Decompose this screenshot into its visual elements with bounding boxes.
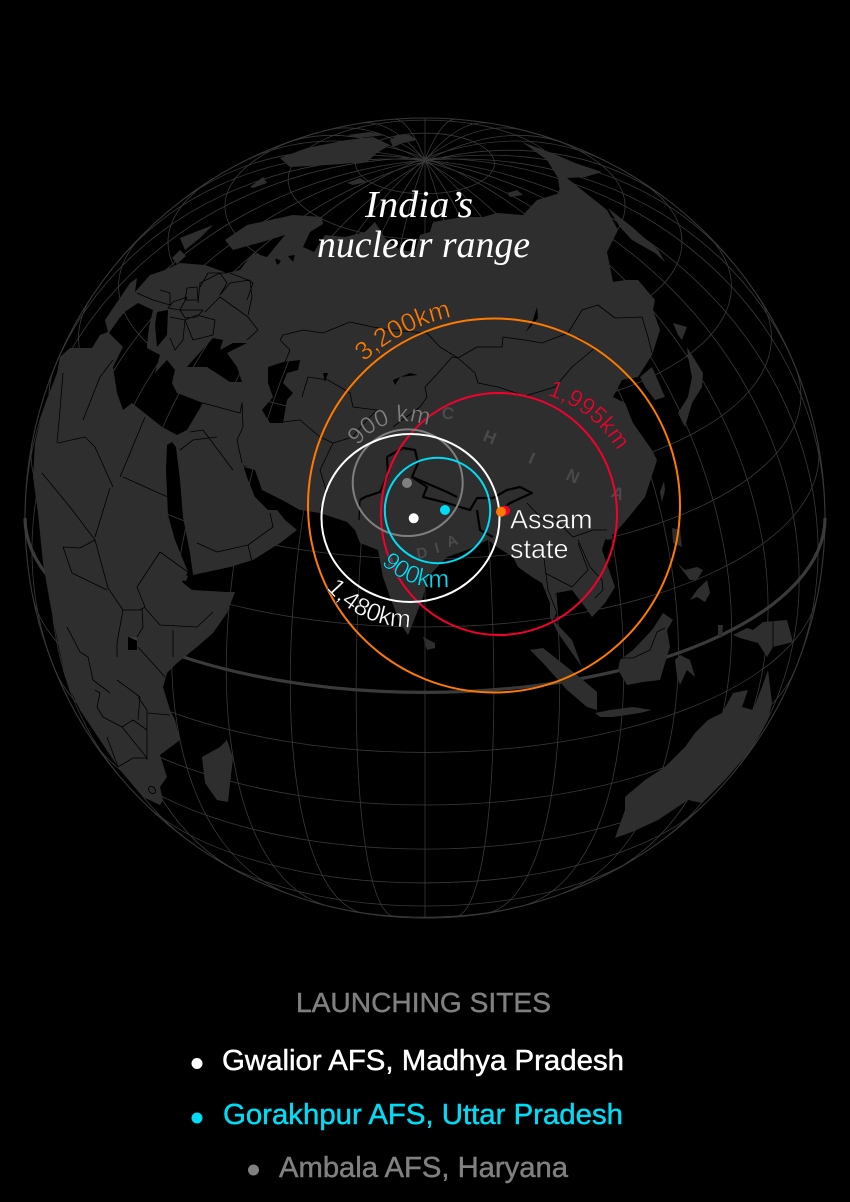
- dot Assam orange: [496, 507, 506, 517]
- country label: India: I: [433, 540, 441, 557]
- country label: China: A: [609, 482, 627, 504]
- globe outline: [25, 118, 825, 918]
- title: India’s: [364, 184, 473, 226]
- dot Gorakhpur: [440, 505, 450, 515]
- country label: India: A: [444, 532, 460, 551]
- country label: India: [386, 532, 460, 573]
- Sulawesi: [675, 655, 695, 685]
- land masses: [33, 132, 793, 838]
- Australia: [615, 670, 772, 838]
- Hainan: [606, 532, 612, 540]
- Japan: [673, 323, 703, 427]
- label gray 900 km: 900 km: [348, 404, 430, 443]
- Borneo: [618, 613, 673, 685]
- range circle 1,480km: [322, 434, 500, 602]
- Philippines: [672, 528, 710, 602]
- Korea: [640, 367, 665, 400]
- Lesotho border: [147, 785, 157, 795]
- range circle 1,995km: [381, 393, 617, 635]
- range circles: [308, 318, 680, 692]
- India thick borders: [360, 448, 532, 537]
- label 1,480km: 1,480km: [326, 580, 410, 628]
- title: [317, 184, 530, 266]
- label Assam state: [510, 504, 593, 564]
- country label: China: I: [526, 449, 538, 468]
- Kamchatka: [608, 208, 665, 262]
- label Assam state: Assam: [510, 504, 593, 534]
- title: nuclear range: [317, 224, 530, 266]
- Eurasia and Africa: [33, 142, 660, 805]
- equator: [25, 518, 825, 692]
- legend item Gwalior: Gwalior AFS, Madhya Pradesh: [222, 1045, 624, 1077]
- New Guinea and Moluccas: [718, 620, 793, 657]
- range circle gray 900km: [353, 429, 463, 536]
- dot Ambala: [402, 478, 412, 488]
- Socotra and Gulf of Aden coast: [181, 574, 188, 581]
- globe map: [25, 118, 825, 918]
- Britain: [172, 225, 213, 264]
- country borders: [42, 273, 773, 767]
- Taiwan: [660, 481, 665, 502]
- label 1,995km: 1,995km: [549, 382, 626, 449]
- range circle 3,200km: [308, 318, 680, 692]
- country label: China: N: [563, 465, 582, 488]
- Sri Lanka: [423, 637, 435, 650]
- country label: China: C: [440, 403, 456, 424]
- dot Assam red: [500, 506, 510, 516]
- Java: [595, 707, 652, 717]
- country label: India: D: [415, 544, 429, 563]
- Arctic islands: [250, 132, 523, 197]
- legend: launching sites: [192, 987, 624, 1184]
- dot Gwalior: [409, 513, 419, 523]
- label Assam state: state: [510, 534, 569, 564]
- label 3,200km: 3,200km: [355, 304, 450, 360]
- Madagascar: [202, 740, 233, 802]
- country label: China: [440, 403, 627, 504]
- country label: India: N: [386, 554, 400, 573]
- India western border: [359, 500, 360, 520]
- graticule: [25, 118, 825, 918]
- legend heading: LAUNCHING SITES: [296, 987, 551, 1018]
- range circle cyan 900km: [385, 458, 490, 563]
- country label: China: H: [481, 426, 499, 449]
- legend item Gorakhpur: Gorakhpur AFS, Uttar Pradesh: [223, 1099, 623, 1131]
- legend item Ambala: Ambala AFS, Haryana: [279, 1152, 569, 1184]
- launch site dots: [402, 478, 510, 523]
- label cyan 900km: 900km: [383, 553, 448, 588]
- Sumatra: [530, 648, 597, 710]
